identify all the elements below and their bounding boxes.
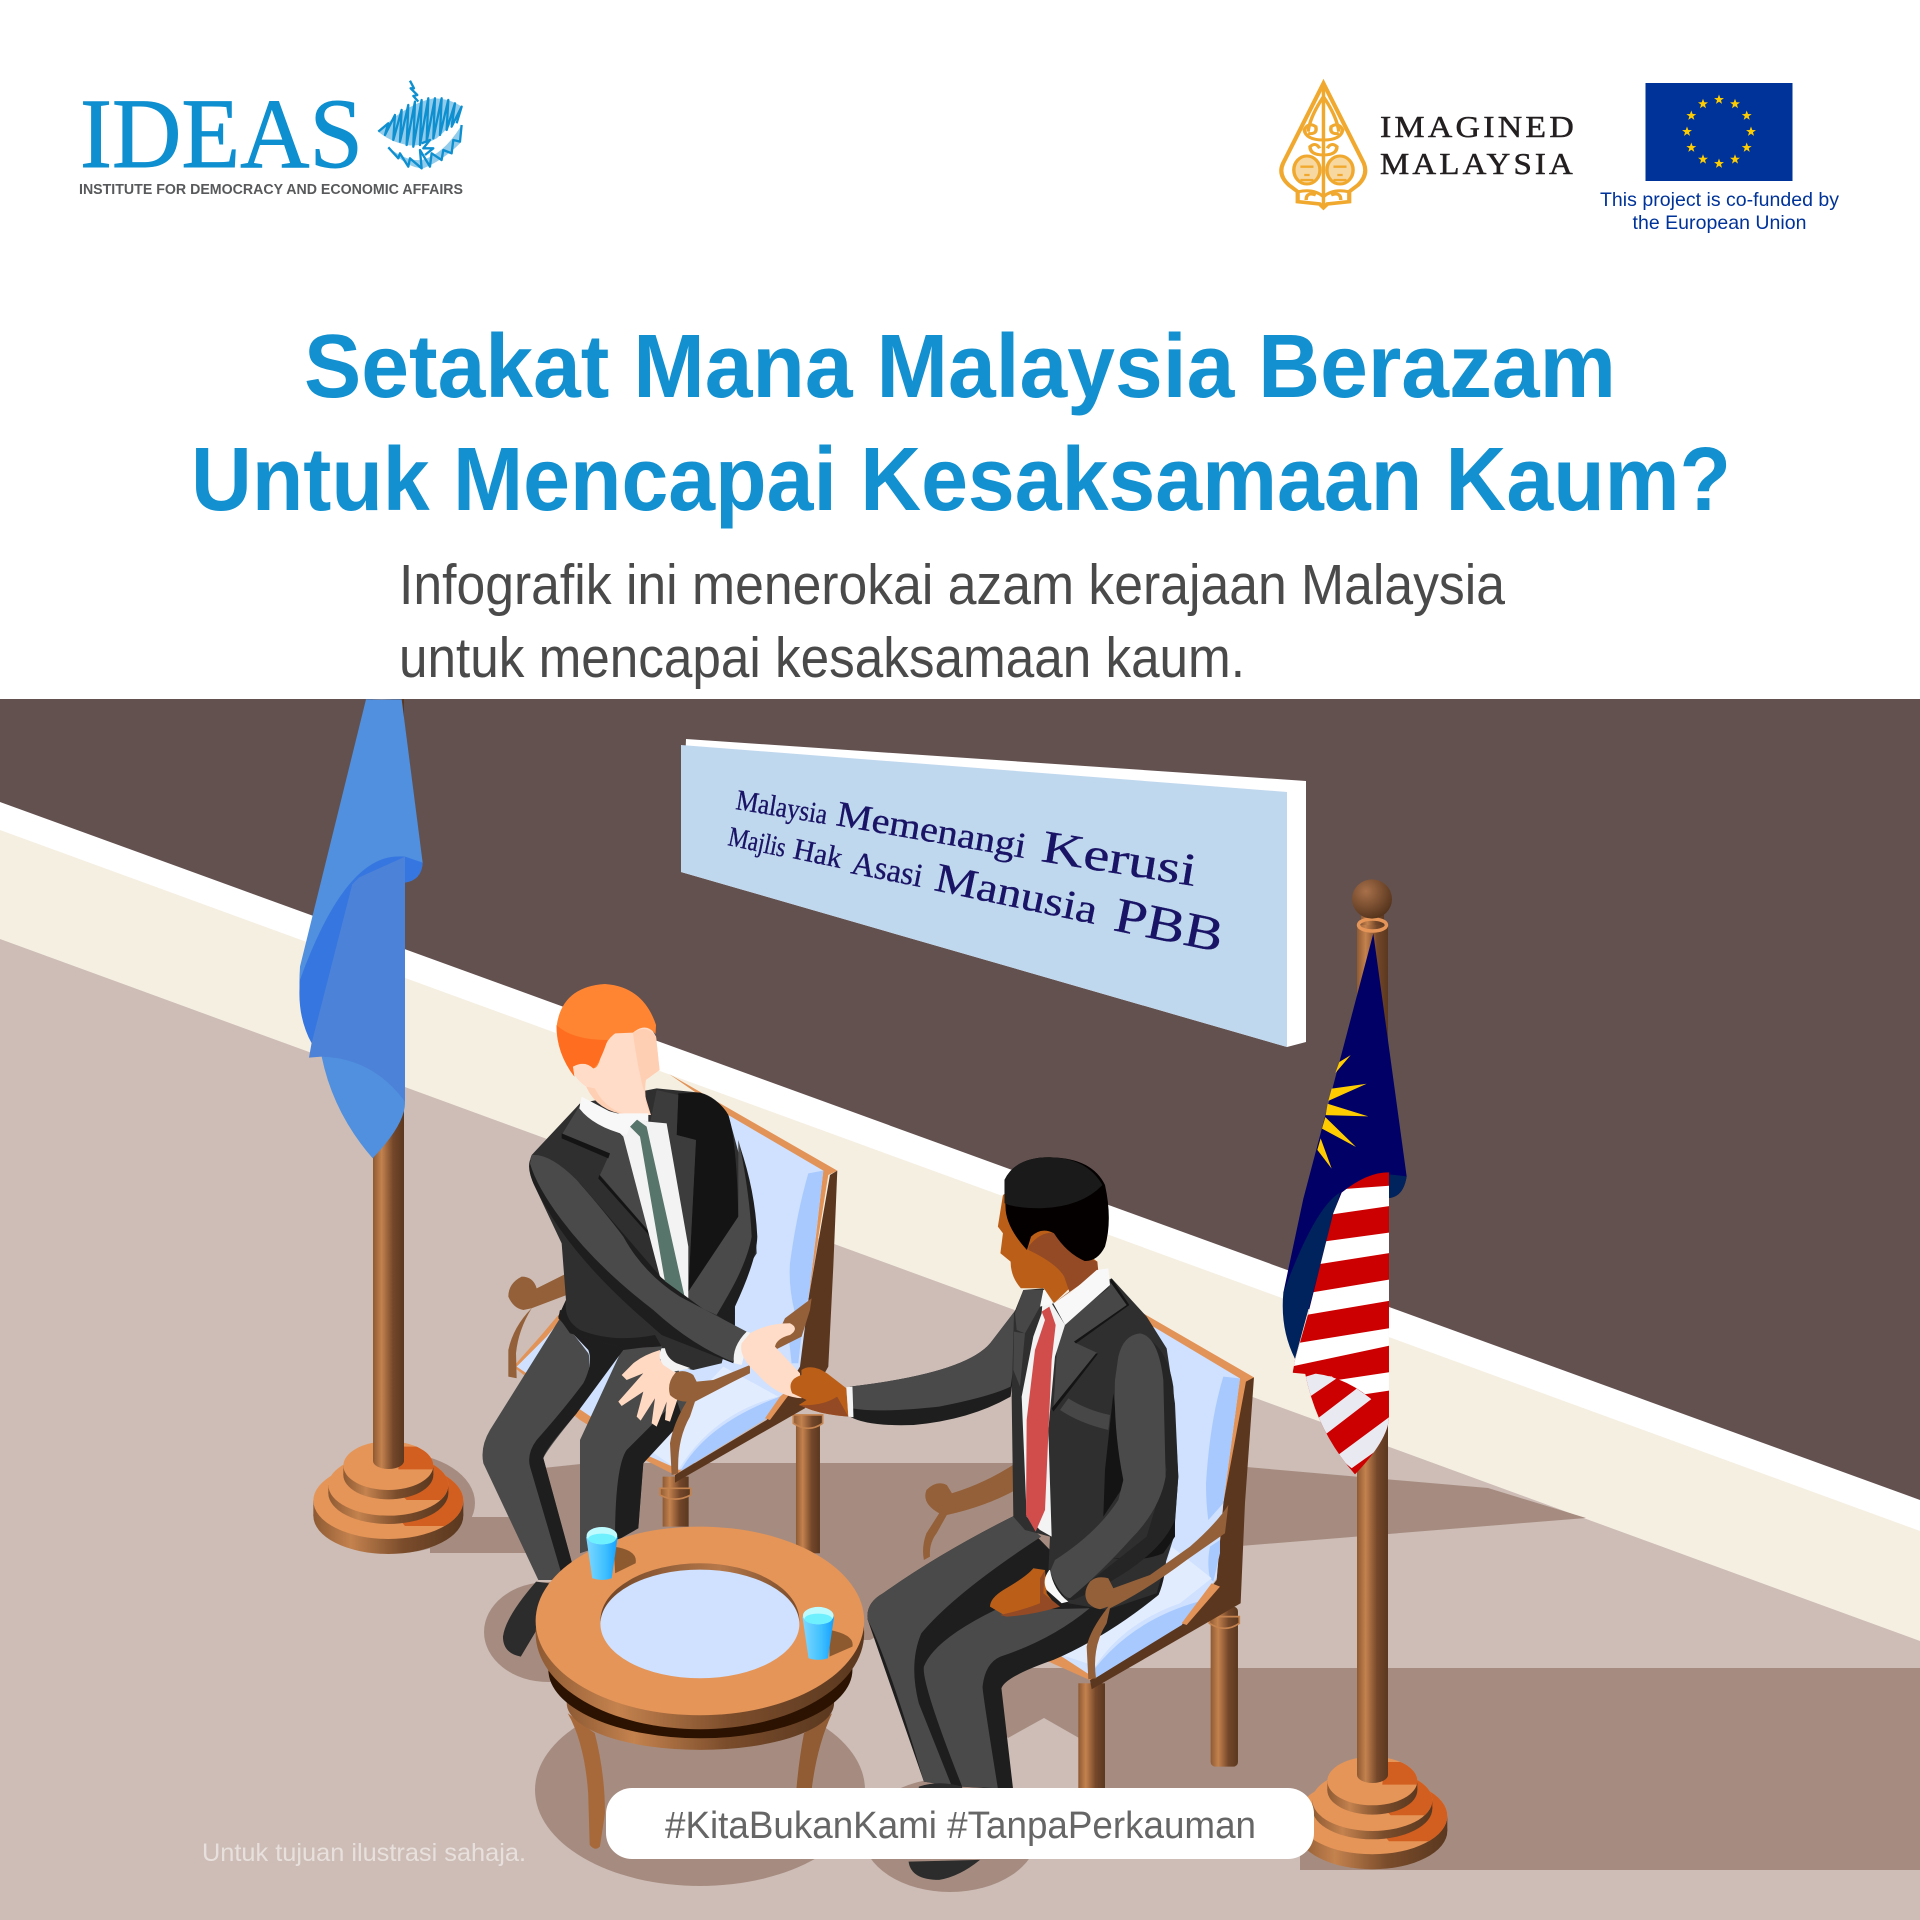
chair 1	[513, 1074, 837, 1553]
illustration disclaimer: Untuk tujuan ilustrasi sahaja.	[202, 1839, 526, 1867]
man 1 shoe	[503, 1582, 549, 1657]
man 1 head	[557, 984, 660, 1115]
man 2 collar	[1040, 1268, 1110, 1325]
Malaysian flag	[1283, 933, 1407, 1476]
man 2 shoes	[909, 1783, 980, 1880]
logo tagline: INSTITUTE FOR DEMOCRACY AND ECONOMIC AFFAIRS	[79, 182, 463, 198]
sign text: Hak	[791, 833, 845, 875]
man 1 suit jacket	[530, 1088, 757, 1370]
sign text: Asasi	[848, 846, 926, 895]
table edge	[536, 1537, 864, 1729]
floor	[0, 939, 1920, 1920]
sign text: Memenangi	[834, 793, 1030, 866]
logo text: MALAYSIA: MALAYSIA	[1380, 146, 1576, 181]
co-funding text: the European Union	[1632, 212, 1806, 234]
logo: Imagined Malaysia	[1281, 83, 1577, 208]
man 1 left hand on knee	[618, 1348, 691, 1427]
cream wall band	[0, 830, 1920, 1920]
man 1 right arm and handshake	[529, 1155, 802, 1398]
man 1 tie	[630, 1119, 685, 1298]
flag pole	[373, 699, 404, 1469]
hashtag pill: #KitaBukanKami #TanpaPerkauman	[665, 1805, 1256, 1847]
title	[191, 317, 1731, 530]
UN flag stand	[299, 699, 467, 1554]
subtitle: Infografik ini menerokai azam kerajaan Malaysia	[399, 553, 1505, 617]
table skirt	[567, 1657, 834, 1750]
chair 2 and man 2 group	[790, 1157, 1254, 1880]
title: Setakat Mana Malaysia Berazam	[304, 317, 1616, 417]
man 1 collar	[579, 1097, 648, 1135]
table top	[536, 1527, 864, 1715]
man 2 head	[998, 1157, 1109, 1303]
man 2 tie	[1026, 1307, 1056, 1532]
subtitle: untuk mencapai kesaksamaan kaum.	[399, 626, 1245, 690]
floor shadows	[319, 1453, 1920, 1892]
round table with glasses	[536, 1527, 864, 1849]
co-funding text: This project is co-funded by	[1600, 189, 1839, 211]
sign text: Majlis	[726, 822, 789, 864]
Malaysia flag stand	[1283, 879, 1451, 1869]
table inner rim	[600, 1563, 799, 1678]
icon: gold wayang leaf emblem	[1281, 83, 1365, 208]
man 2 trousers	[867, 1515, 1166, 1790]
EU flag	[1646, 83, 1792, 181]
UN blue flag	[299, 699, 423, 1158]
poster sign on wall	[681, 739, 1306, 1047]
white skirting stripe	[0, 802, 1920, 1920]
glass 1	[586, 1527, 636, 1580]
glass 2	[802, 1607, 853, 1660]
hashtag pill	[606, 1788, 1314, 1859]
icon: IDEAS scribbled bird	[378, 81, 462, 168]
wall	[0, 699, 1920, 1920]
title: Untuk Mencapai Kesaksamaan Kaum?	[191, 430, 1731, 530]
sign text: Kerusi	[1038, 821, 1201, 896]
logo text: IMAGINED: IMAGINED	[1380, 109, 1577, 144]
sign text: Malaysia	[734, 784, 830, 831]
sign text: Manusia	[931, 854, 1102, 933]
sign blue face	[681, 745, 1287, 1047]
chair 2 near arm rest	[1085, 1505, 1228, 1679]
illustration: meeting room scene	[0, 699, 1920, 1920]
subtitle	[399, 553, 1505, 690]
chair 1 near arm rest	[669, 1298, 812, 1475]
man 2 suit jacket	[1012, 1278, 1178, 1610]
chair 1 far arm rest	[508, 1273, 567, 1378]
man 2 extended arm	[850, 1300, 1023, 1425]
chair 2	[1045, 1313, 1254, 1788]
logo: IDEAS	[79, 78, 463, 198]
flag stand base	[313, 1441, 467, 1554]
person 1 group: chair and man on left	[482, 984, 837, 1657]
logo: European Union flag and co-funding note	[1600, 83, 1839, 234]
table dark band	[548, 1602, 852, 1738]
table legs	[568, 1713, 832, 1849]
man 1 legs	[482, 1310, 693, 1580]
table glass inlay	[600, 1570, 799, 1678]
sign text	[726, 784, 1229, 963]
chair 2 far arm rest	[923, 1463, 1016, 1560]
flag pole with finial	[1352, 879, 1392, 1783]
logo wordmark: IDEAS: IDEAS	[80, 78, 363, 189]
sign white backing	[681, 739, 1306, 1047]
sign text: PBB	[1110, 887, 1229, 963]
handshake: man 2 hand	[790, 1367, 853, 1417]
man 2 lower hand	[990, 1568, 1068, 1617]
flag stand base	[1297, 1757, 1451, 1869]
